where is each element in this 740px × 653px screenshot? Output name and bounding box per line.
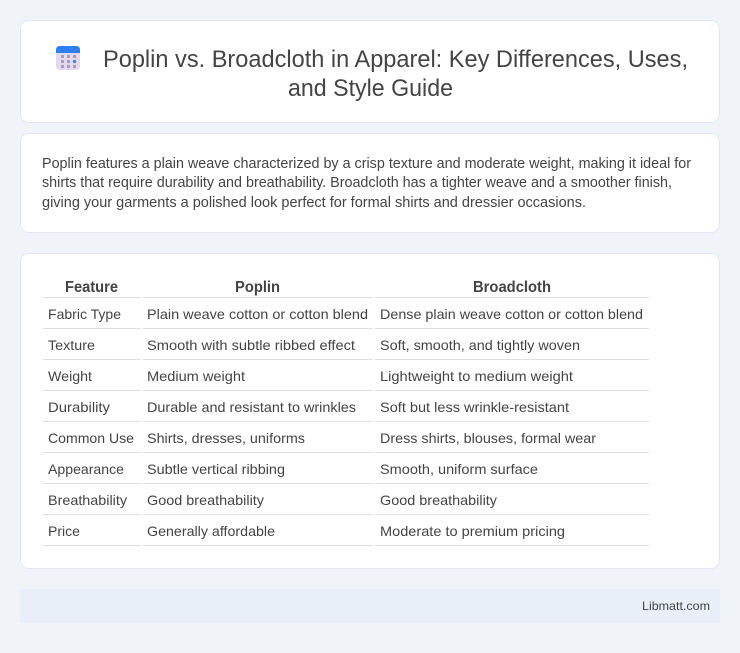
row: Weight: Weight: [48, 368, 92, 384]
row: Price: Generally affordable: [147, 523, 275, 539]
row: Fabric Type: Dense plain weave cotton or cotton blend: [380, 306, 643, 322]
row: Common Use: Shirts, dresses, uniforms: [147, 430, 305, 446]
row: Price: Moderate to premium pricing: [380, 523, 565, 539]
row: Appearance: Appearance: [48, 461, 124, 477]
panel: intro text: [20, 134, 720, 232]
row: Breathability: Good breathability: [380, 492, 497, 508]
footer bar: [20, 589, 720, 623]
row: Price: [48, 523, 565, 539]
table header: Feature: [65, 279, 118, 296]
row: Texture: Soft, smooth, and tightly woven: [380, 337, 580, 353]
row: Breathability: [48, 492, 497, 508]
row: Texture: [48, 337, 580, 353]
row: Price: Price: [48, 523, 80, 539]
panel: comparison table: [20, 254, 720, 568]
row: Appearance: Subtle vertical ribbing: [147, 461, 285, 477]
row: Weight: [48, 368, 573, 384]
table header: Broadcloth: [473, 279, 551, 296]
row: Appearance: [48, 461, 538, 477]
title: and Style Guide: [288, 75, 453, 102]
row: Durability: Durable and resistant to wrinkles: [147, 399, 356, 415]
row: Weight: Lightweight to medium weight: [380, 368, 573, 384]
table header: Poplin: [235, 279, 280, 296]
row: Common Use: Dress shirts, blouses, formal wear: [380, 430, 596, 446]
title: Poplin vs. Broadcloth in Apparel: Key Differences, Uses,: [103, 46, 688, 73]
row: Texture: Texture: [48, 337, 95, 353]
row: Durability: Durability: [48, 399, 110, 415]
title: [103, 46, 688, 102]
row: Common Use: Common Use: [48, 430, 134, 446]
intro paragraph: Poplin features a plain weave characterized by a crisp texture and moderate weight, making it ideal for: [42, 156, 691, 172]
intro paragraph: shirts that require durability and breathability. Broadcloth has a tighter weave and a smoother finish,: [42, 175, 672, 191]
row: Fabric Type: Plain weave cotton or cotton blend: [147, 306, 368, 322]
row: Breathability: Good breathability: [147, 492, 264, 508]
row: Appearance: Smooth, uniform surface: [380, 461, 538, 477]
icon: calendar grid: [56, 46, 80, 70]
panel: title header: [20, 20, 720, 122]
table rules: [43, 298, 649, 546]
row: Common Use: [48, 430, 596, 446]
row: Fabric Type: [48, 306, 643, 322]
row: Fabric Type: Fabric Type: [48, 306, 121, 322]
footer text: Libmatt.com: [642, 599, 710, 613]
row: Durability: [48, 399, 569, 415]
intro paragraph: [42, 156, 691, 211]
row: Durability: Soft but less wrinkle-resistant: [380, 399, 569, 415]
table header: [65, 279, 551, 296]
intro paragraph: giving your garments a polished look perfect for formal shirts and dressier occasions.: [42, 195, 586, 211]
row: Weight: Medium weight: [147, 368, 245, 384]
row: Texture: Smooth with subtle ribbed effect: [147, 337, 355, 353]
row: Breathability: Breathability: [48, 492, 127, 508]
